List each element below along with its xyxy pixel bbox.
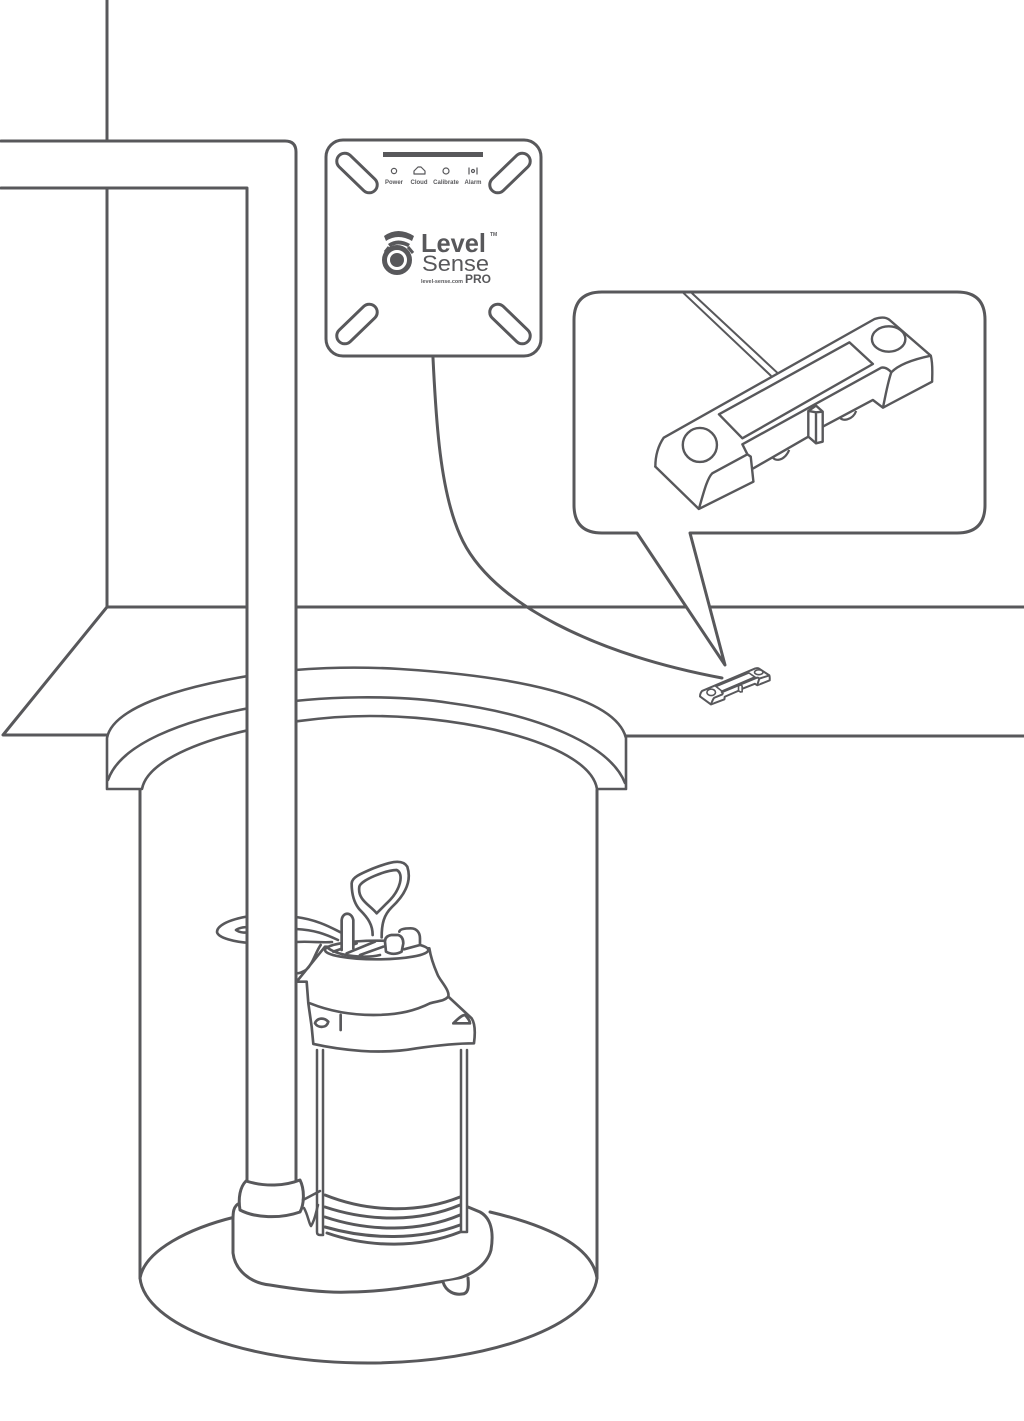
check valve detail: [303, 1191, 320, 1226]
status labels: [385, 180, 482, 186]
control unit panel: [326, 140, 541, 356]
sensor cable: [433, 358, 722, 678]
Level Sense logo: Sense: [422, 251, 489, 276]
pump head: [297, 862, 475, 1051]
mounting slots: [333, 150, 534, 347]
logo mark: [384, 231, 414, 272]
Level Sense logo: level-sense.com: [421, 279, 463, 285]
status labels: Power: [385, 180, 404, 186]
status icons: [391, 167, 477, 174]
status labels: Alarm: [464, 180, 482, 186]
sump pit rim: [107, 668, 626, 789]
pump base: [233, 1203, 492, 1294]
status bar: [383, 152, 483, 157]
motor body and columns: [317, 1050, 467, 1244]
status labels: Calibrate: [433, 180, 459, 186]
Level Sense logo: [384, 228, 497, 286]
sensor on floor: [700, 668, 770, 704]
sensor close-up: [655, 293, 932, 509]
wiring behind the pipe: [217, 916, 342, 943]
sump pit walls and bottom: [140, 790, 597, 1363]
Level Sense logo: PRO: [465, 272, 491, 286]
submersible pump: [233, 862, 492, 1294]
pipe coupling: [239, 1180, 303, 1217]
discharge pipe: [0, 141, 296, 1182]
callout bubble: [574, 292, 985, 665]
Level Sense logo: TM: [490, 232, 497, 238]
status labels: Cloud: [410, 180, 428, 186]
callout with sensor close-up: [574, 292, 985, 665]
wall corner and floor lines: [3, 0, 1024, 736]
logo wordmark: Level: [421, 228, 486, 258]
